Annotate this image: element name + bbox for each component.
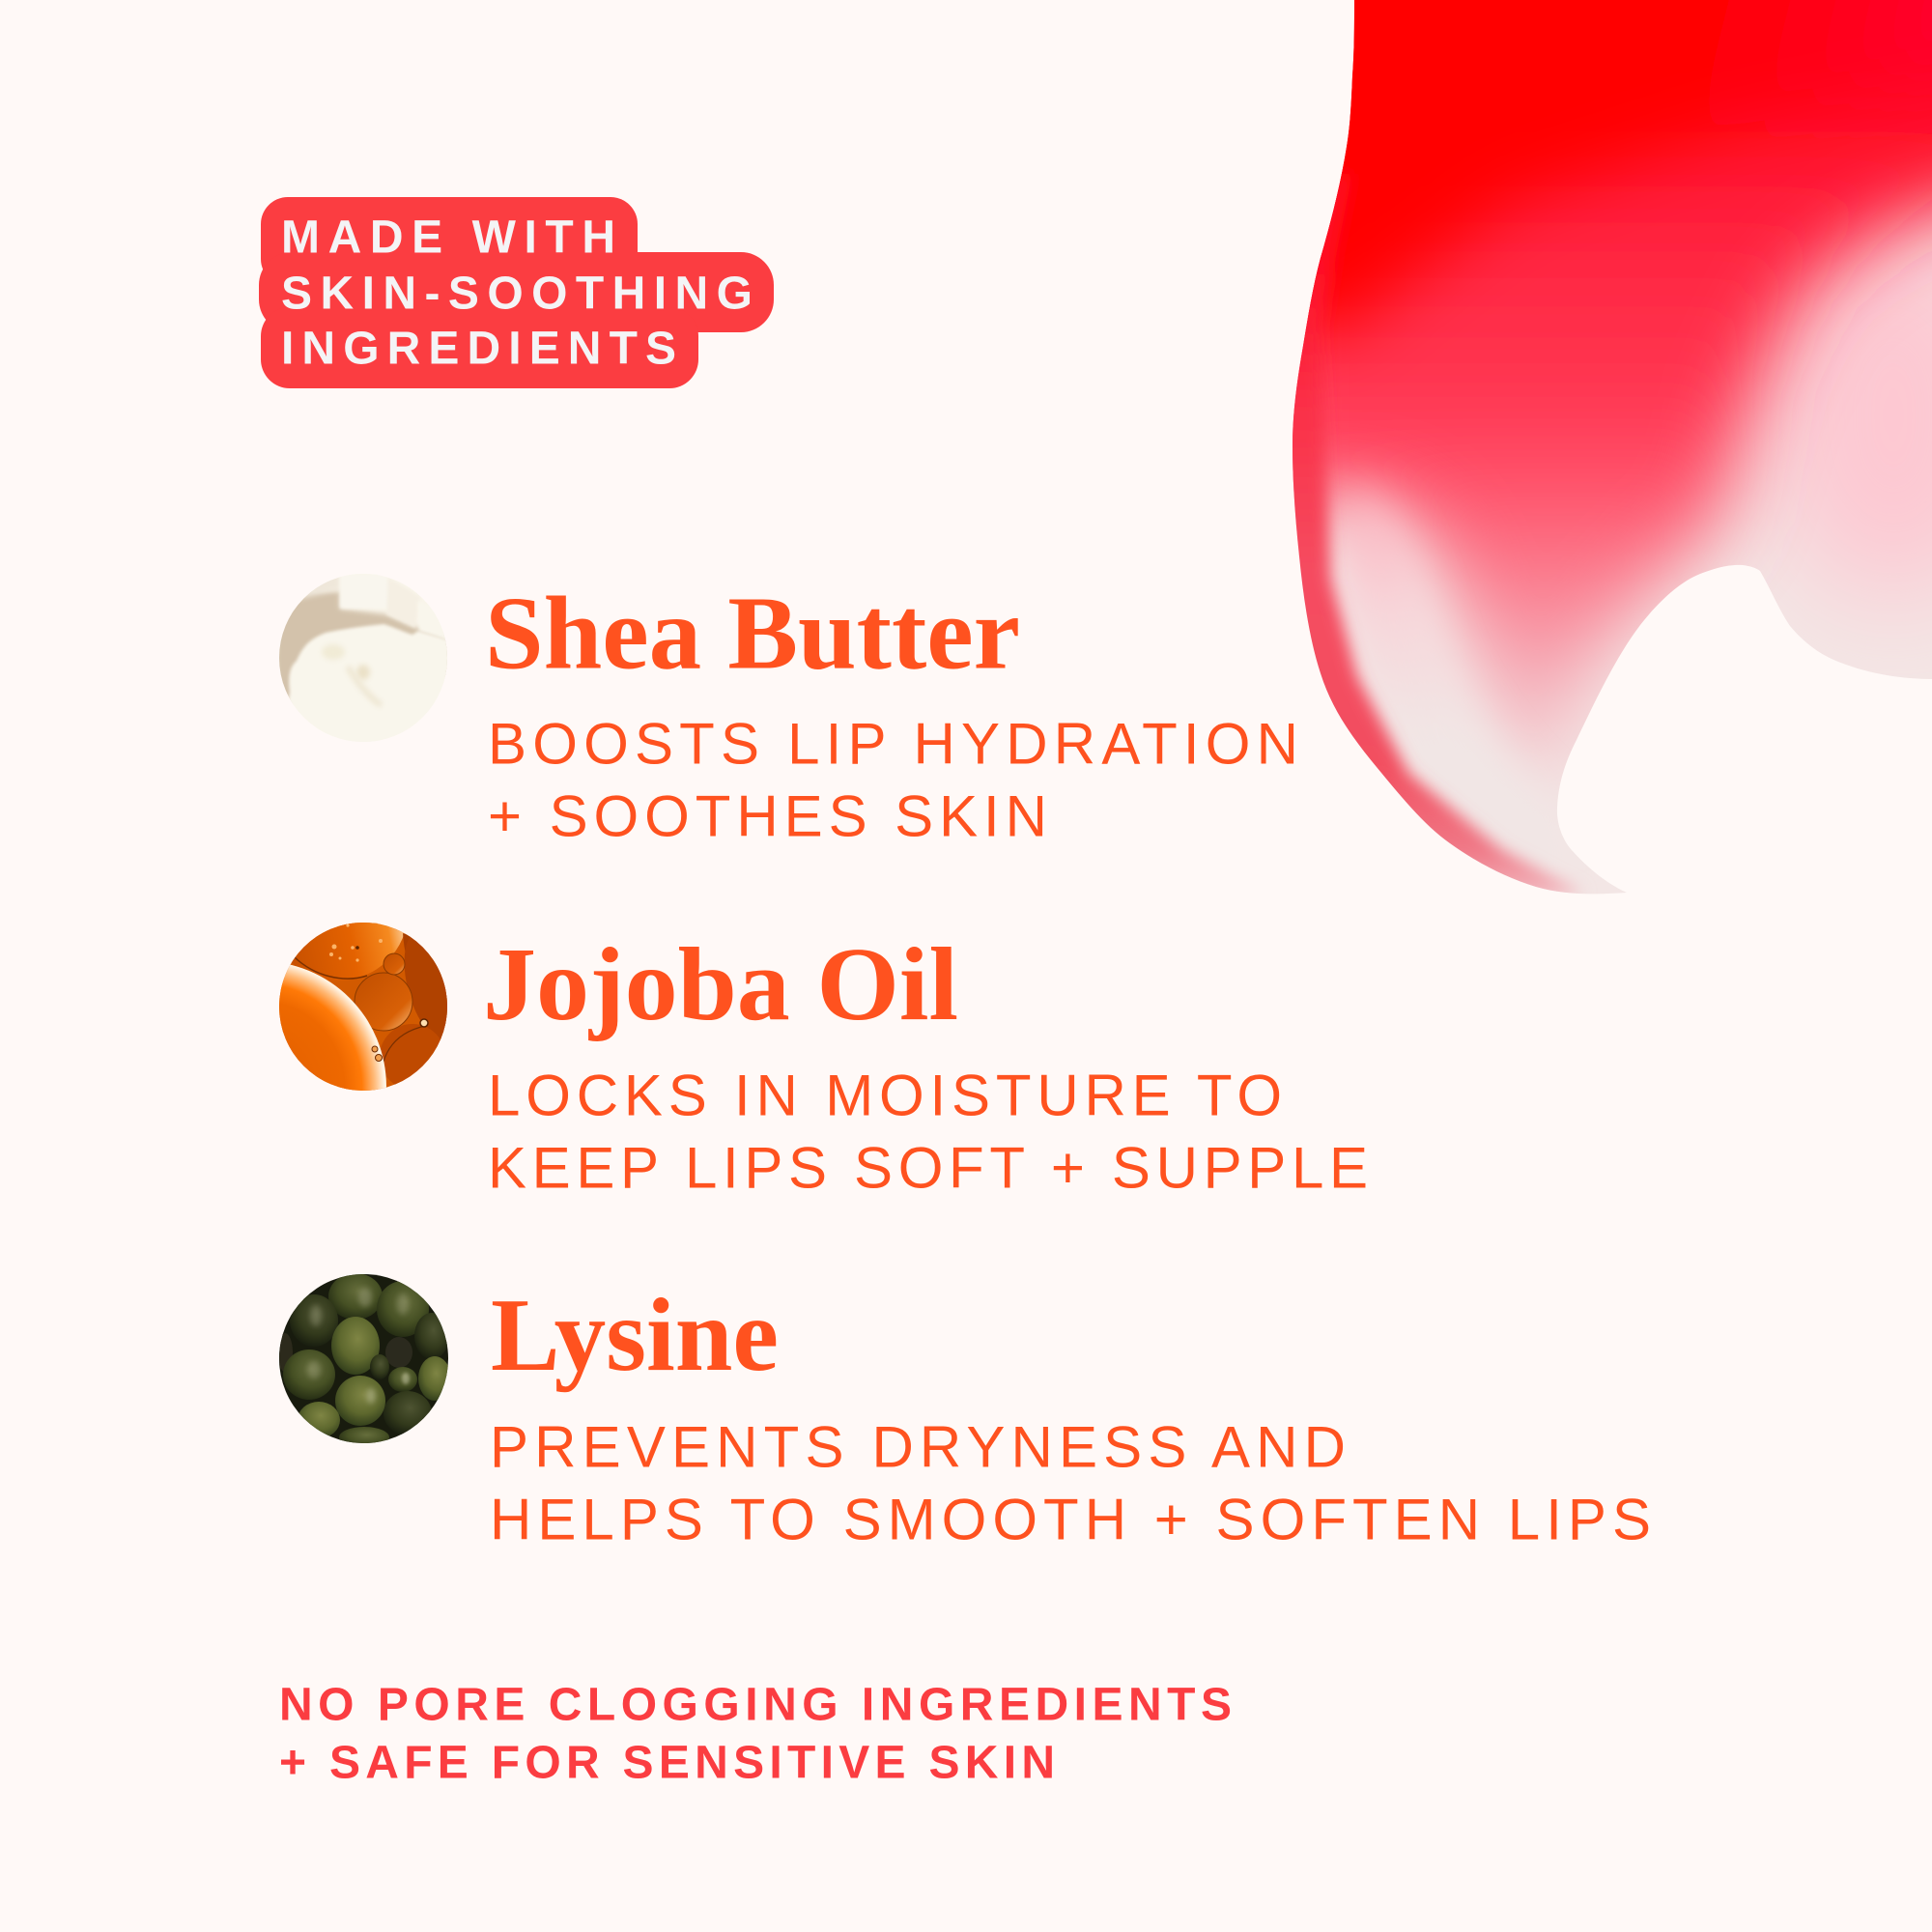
description: jojoba oil: KEEP LIPS SOFT + SUPPLE bbox=[488, 1135, 1368, 1200]
description: shea butter: + SOOTHES SKIN bbox=[488, 783, 1047, 848]
lip product smear bbox=[1293, 0, 1932, 895]
description: jojoba oil bbox=[488, 1064, 1368, 1200]
description: shea butter bbox=[488, 712, 1298, 848]
badge: made with skin-soothing ingredients: INGREDIENTS bbox=[281, 324, 676, 375]
heading: shea butter: Shea Butter bbox=[485, 577, 1020, 692]
icon: jojoba oil photo bbox=[279, 923, 447, 1091]
ingredient: shea butter bbox=[275, 570, 1298, 848]
badge: made with skin-soothing ingredients bbox=[259, 197, 774, 388]
footer note: NO PORE CLOGGING INGREDIENTS bbox=[279, 1680, 1232, 1731]
badge: made with skin-soothing ingredients: MADE WITH bbox=[281, 213, 615, 264]
description: lysine bbox=[490, 1415, 1651, 1551]
ingredient: lysine bbox=[275, 1270, 1651, 1551]
heading: jojoba oil: Jojoba Oil bbox=[483, 927, 958, 1042]
description: lysine: PREVENTS DRYNESS AND bbox=[490, 1415, 1346, 1480]
footer note: + SAFE FOR SENSITIVE SKIN bbox=[279, 1738, 1055, 1789]
ingredient: jojoba oil bbox=[279, 923, 1366, 1188]
icon: shea butter photo bbox=[279, 574, 447, 742]
heading: lysine: Lysine bbox=[491, 1278, 779, 1393]
footer note bbox=[279, 1680, 1232, 1789]
description: shea butter: BOOSTS LIP HYDRATION bbox=[488, 712, 1298, 777]
badge: made with skin-soothing ingredients: SKIN-SOOTHING bbox=[281, 268, 753, 319]
icon: lysine photo bbox=[275, 1270, 453, 1448]
description: lysine: HELPS TO SMOOTH + SOFTEN LIPS bbox=[490, 1487, 1651, 1551]
description: jojoba oil: LOCKS IN MOISTURE TO bbox=[488, 1064, 1282, 1128]
